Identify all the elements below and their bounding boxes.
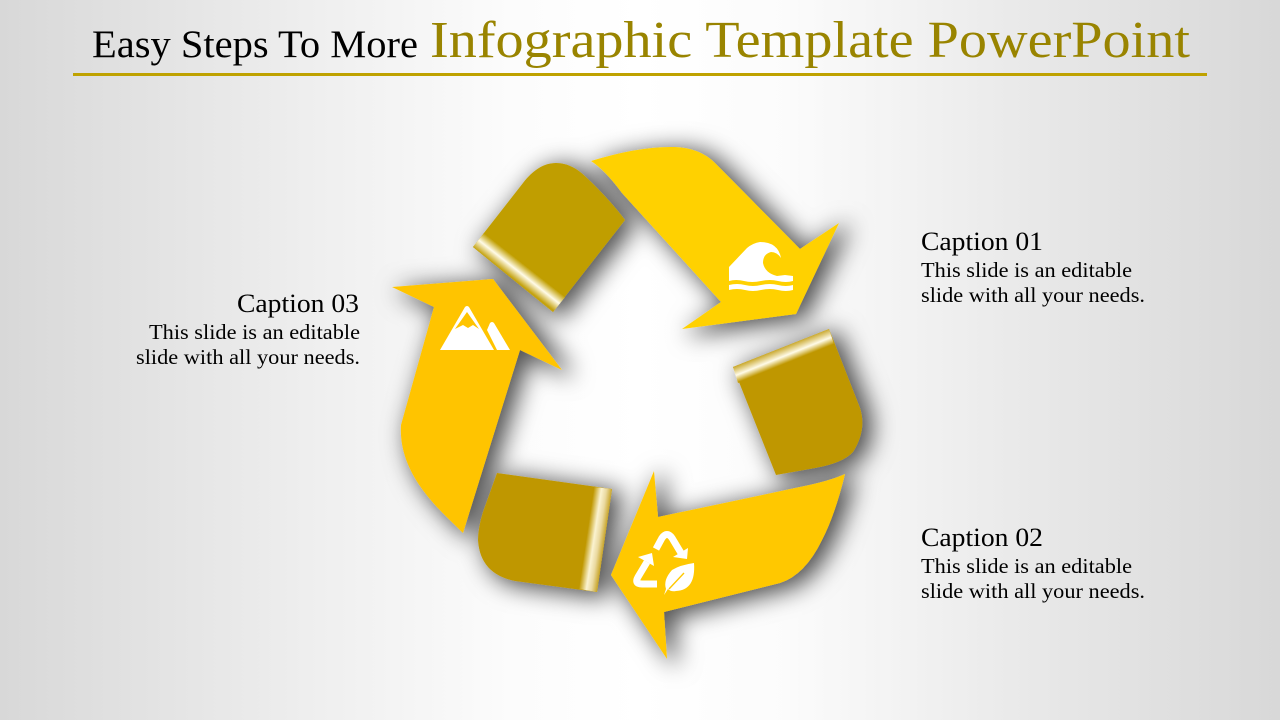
- icon: wave: [729, 242, 793, 291]
- caption 03: This slide is an editable: [149, 320, 360, 344]
- arrow 02: [611, 471, 845, 659]
- caption 01: [921, 227, 1145, 307]
- segment: dark top-left band: [473, 163, 625, 312]
- caption 02: Caption 02: [921, 523, 1043, 552]
- arrow 03: [392, 279, 562, 533]
- arrow 01: [591, 147, 839, 329]
- title: [92, 12, 1191, 69]
- caption 02: This slide is an editable: [921, 554, 1132, 578]
- caption 01: Caption 01: [921, 227, 1043, 256]
- caption 03: slide with all your needs.: [136, 345, 360, 369]
- caption 02: slide with all your needs.: [921, 579, 1145, 603]
- caption 01: This slide is an editable: [921, 258, 1132, 282]
- segment: dark right band: [733, 329, 862, 475]
- icon: recycle with leaf: [637, 534, 694, 595]
- icon: mountains: [440, 306, 510, 350]
- caption 03: [136, 289, 360, 369]
- title: Infographic Template PowerPoint: [430, 12, 1191, 69]
- caption 03: Caption 03: [237, 289, 359, 318]
- recycling cycle diagram: [392, 147, 862, 659]
- segment: dark bottom band: [478, 473, 612, 592]
- caption 02: [921, 523, 1145, 603]
- title: Easy Steps To More: [92, 23, 418, 66]
- caption 01: slide with all your needs.: [921, 283, 1145, 307]
